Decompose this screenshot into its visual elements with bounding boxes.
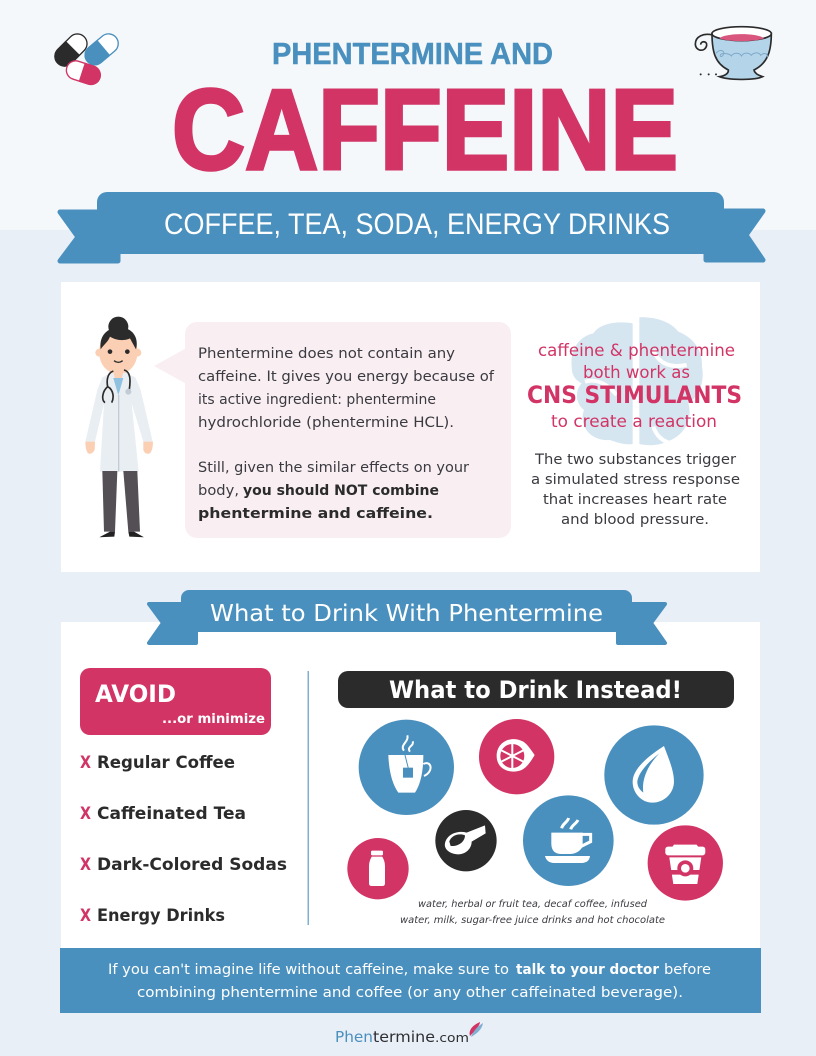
icon: water drop [604, 725, 704, 825]
text block: phentermine explanation: Phentermine does not contain any [198, 346, 455, 362]
ribbon heading [149, 590, 665, 643]
text block: cns stimulants: caffeine & phentermine [538, 341, 735, 361]
avoid list [80, 753, 287, 926]
icon: brain [571, 317, 703, 445]
heading bar: drink instead: What to Drink Instead! [389, 676, 682, 704]
icon: coffee cup [523, 795, 614, 886]
avoid list: X [80, 855, 91, 875]
heading text: What to Drink With Phentermine [210, 601, 603, 627]
icon: teacup [695, 27, 771, 79]
logo: termine [373, 1028, 435, 1046]
icon: takeaway cup [648, 825, 723, 901]
text block: cns stimulants: both work as [583, 363, 690, 383]
callout: talk to your doctor: If you can't imagine life without caffeine, make sure to [108, 962, 509, 978]
avoid list: X [80, 804, 91, 824]
text block: phentermine explanation: you should NOT combine [243, 483, 439, 499]
avoid box: ...or minimize [162, 711, 265, 727]
icon: pills [50, 29, 123, 88]
text block: phentermine explanation: body, [198, 483, 239, 499]
drink icons [347, 719, 723, 901]
avoid list: X [80, 753, 91, 773]
icon: tea mug [359, 720, 454, 815]
caption: water, milk, sugar-free juice drinks and hot chocolate [400, 915, 665, 926]
panel: what to drink [61, 590, 760, 948]
text block: stress response: The two substances trigger [534, 452, 736, 468]
logo: Phen [335, 1028, 373, 1046]
icon: lemon [479, 719, 554, 794]
ribbon text: COFFEE, TEA, SODA, ENERGY DRINKS [164, 208, 670, 241]
ribbon banner: drinks [60, 192, 763, 261]
title: caffeine: CAFFEINE [172, 67, 678, 194]
text block: cns stimulants [527, 341, 742, 432]
callout: talk to your doctor: talk to your doctor [516, 962, 660, 978]
text block: phentermine explanation [198, 346, 495, 522]
avoid box: AVOID [95, 680, 176, 708]
text block: stress response [531, 452, 740, 528]
text block: cns stimulants: CNS STIMULANTS [527, 381, 742, 409]
avoid list: Caffeinated Tea [97, 804, 246, 824]
title: phentermine and: PHENTERMINE AND [272, 36, 553, 71]
text block: cns stimulants: to create a reaction [551, 412, 717, 432]
text block: phentermine explanation: hydrochloride (phentermine HCL). [198, 415, 454, 431]
caption [400, 899, 665, 926]
text block: phentermine explanation: caffeine. It gives you energy because of [198, 369, 495, 385]
icon: spoon [435, 810, 497, 871]
text block: stress response: that increases heart rate [543, 492, 727, 508]
icon: doctor [85, 317, 153, 537]
text block: phentermine explanation: its active ingredient: phentermine [198, 392, 436, 408]
icon: bottle [347, 838, 409, 899]
text block: stress response: a simulated stress response [531, 472, 740, 488]
callout: talk to your doctor: before [664, 962, 711, 978]
avoid list: X [80, 906, 91, 926]
callout: talk to your doctor: combining phentermine and coffee (or any other caffeinated beverage). [137, 985, 683, 1001]
logo: .com [435, 1031, 469, 1045]
panel: intro [61, 282, 760, 572]
avoid box [80, 668, 271, 735]
logo [335, 1022, 483, 1046]
avoid list: Energy Drinks [97, 906, 225, 926]
text block: phentermine explanation: Still, given the similar effects on your [198, 460, 469, 476]
callout: talk to your doctor [60, 948, 761, 1013]
text block: stress response: and blood pressure. [561, 512, 709, 528]
text block: phentermine explanation: phentermine and caffeine. [198, 506, 433, 522]
avoid list: Regular Coffee [97, 753, 235, 773]
speech bubble [154, 322, 511, 538]
avoid list: Dark-Colored Sodas [97, 855, 287, 875]
heading bar: drink instead [338, 671, 734, 708]
caption: water, herbal or fruit tea, decaf coffee, infused [418, 899, 648, 910]
